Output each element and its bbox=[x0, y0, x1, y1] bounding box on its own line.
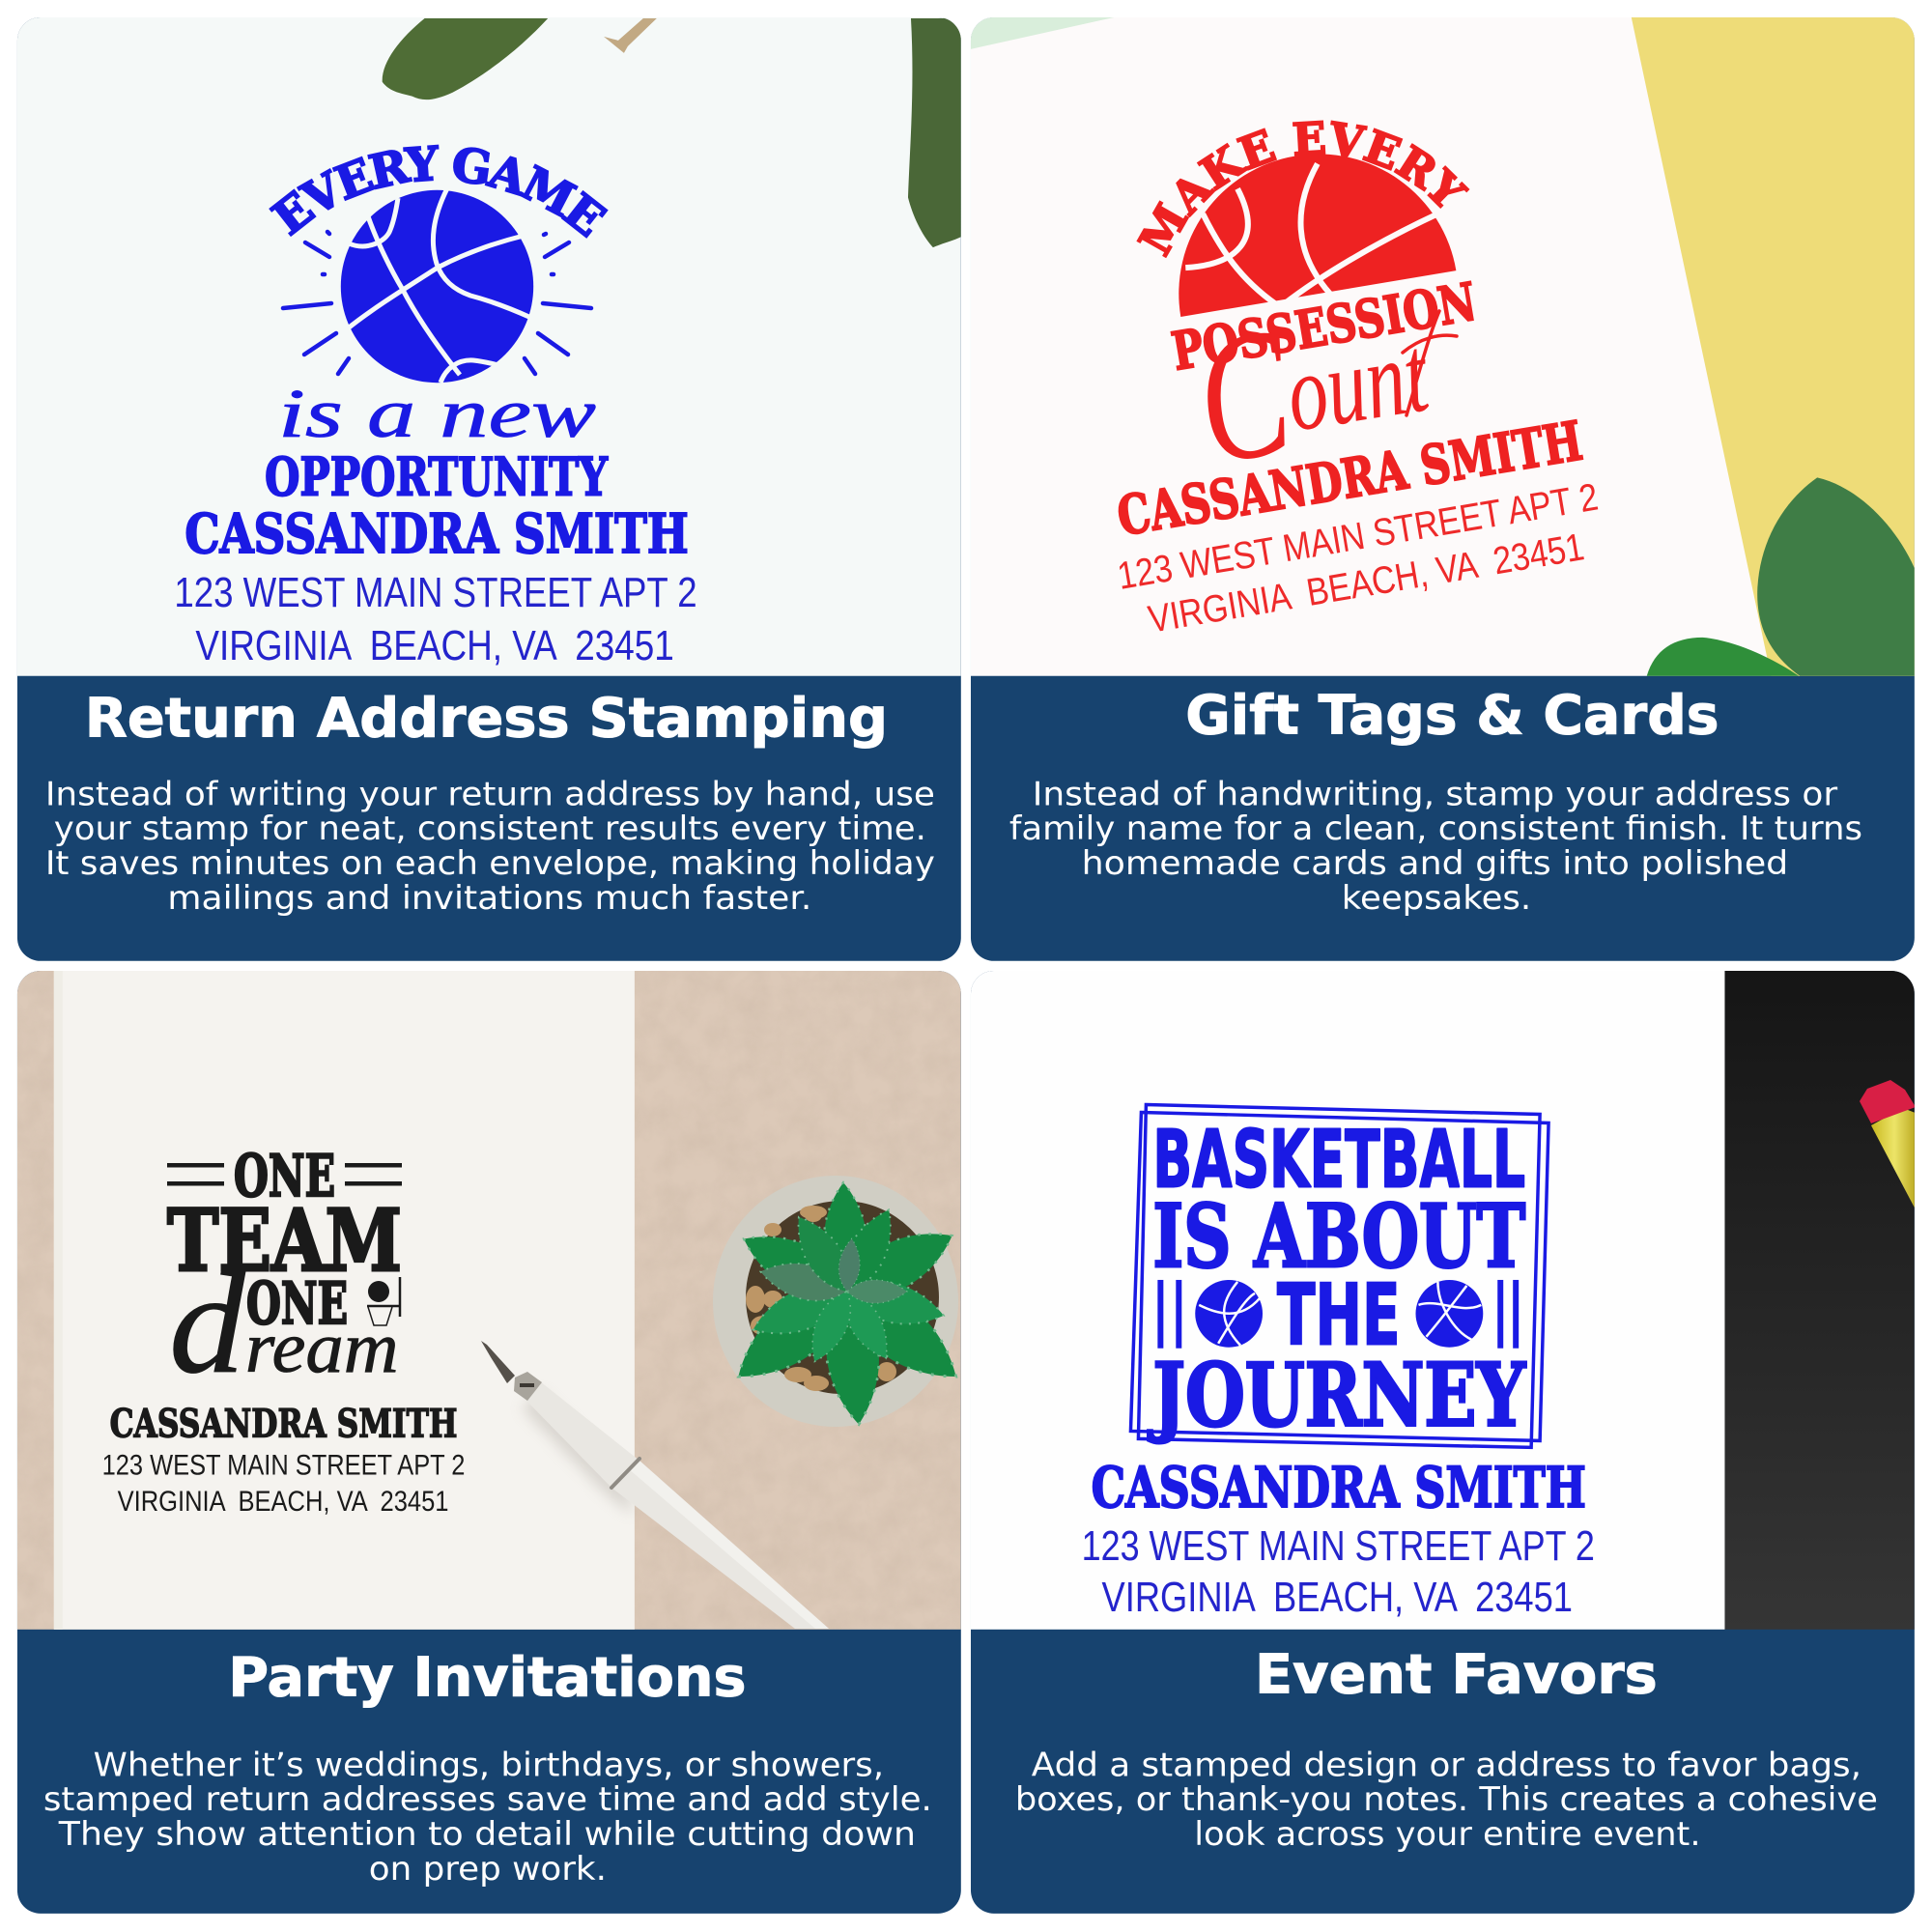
twig bbox=[604, 18, 657, 53]
body text bbox=[43, 1746, 932, 1888]
body text: homemade cards and gifts into polished bbox=[1082, 844, 1788, 882]
arched headline: MAKE EVERY bbox=[1136, 120, 1470, 259]
body text bbox=[1009, 775, 1862, 917]
yellow background bbox=[1632, 17, 1915, 676]
address line 1: 123 WEST MAIN STREET APT 2 bbox=[1082, 1522, 1595, 1570]
body text: It saves minutes on each envelope, making holiday bbox=[45, 844, 935, 882]
heading: Return Address Stamping bbox=[85, 688, 888, 751]
stamp: blue journey design bbox=[1082, 1105, 1595, 1621]
leaf: top right bbox=[908, 18, 961, 247]
slab line: IS ABOUT bbox=[1152, 1186, 1525, 1288]
address line 1: 123 WEST MAIN STREET APT 2 bbox=[174, 569, 697, 616]
body text bbox=[1015, 1746, 1878, 1853]
name: CASSANDRA SMITH bbox=[1113, 410, 1587, 549]
hoop icon bbox=[367, 1277, 400, 1325]
body text: Instead of handwriting, stamp your address or bbox=[1033, 775, 1837, 812]
panel: gift tags and cards bbox=[970, 17, 1915, 961]
stamp: black team design bbox=[166, 1151, 402, 1374]
slab word: THE bbox=[1277, 1266, 1401, 1365]
photo: black stamp on notebook with pen and plant bbox=[17, 971, 973, 1630]
dark surface bbox=[1724, 971, 1915, 1630]
name: CASSANDRA SMITH bbox=[185, 503, 689, 566]
body text: stamped return addresses save time and add style. bbox=[43, 1780, 932, 1818]
pencil bbox=[1860, 1080, 1918, 1213]
leaf: small bbox=[1647, 638, 1799, 676]
address line 2: VIRGINIA BEACH, VA 23451 bbox=[118, 1486, 449, 1518]
address line 2: VIRGINIA BEACH, VA 23451 bbox=[195, 622, 674, 669]
panel: return address stamping bbox=[17, 17, 961, 961]
slab line: JOURNEY bbox=[1148, 1345, 1526, 1446]
address line 1: 123 WEST MAIN STREET APT 2 bbox=[102, 1449, 465, 1481]
body text: mailings and invitations much faster. bbox=[167, 879, 811, 917]
script word: ount bbox=[1278, 313, 1437, 455]
arched headline: EVERY GAME bbox=[269, 145, 609, 239]
rounded line: BASKETBALL bbox=[1152, 1114, 1525, 1206]
slab line one two: ONE bbox=[246, 1270, 348, 1338]
stamp: blue basketball design bbox=[269, 145, 609, 438]
script word: C bbox=[1183, 288, 1304, 503]
panel: event favors bbox=[971, 971, 1918, 1914]
balls and bars row bbox=[1157, 1280, 1519, 1349]
plant pot bbox=[713, 1176, 973, 1427]
notebook bbox=[54, 971, 635, 1630]
pebbles bbox=[746, 1206, 896, 1391]
leaf: large bbox=[1757, 477, 1915, 676]
body text: family name for a clean, consistent finish. It turns bbox=[1009, 810, 1862, 847]
panel: party invitations bbox=[17, 971, 973, 1914]
slab line team: TEAM bbox=[167, 1190, 402, 1291]
body text: look across your entire event. bbox=[1194, 1815, 1701, 1853]
body text: keepsakes. bbox=[1342, 879, 1531, 917]
name: CASSANDRA SMITH bbox=[110, 1402, 457, 1446]
script word: dream bbox=[169, 1243, 399, 1404]
name: CASSANDRA SMITH bbox=[1092, 1455, 1586, 1520]
pale green corner bbox=[971, 17, 1115, 49]
slab line: POSSESSION bbox=[1167, 270, 1481, 383]
slab line: OPPORTUNITY bbox=[265, 445, 608, 507]
photo: blue framed stamp on white with dark surface bbox=[971, 971, 1918, 1630]
pen bbox=[481, 1341, 829, 1629]
body text: Instead of writing your return address by hand, use bbox=[45, 775, 935, 812]
photo: blue basketball stamp on white with leaves bbox=[17, 17, 961, 676]
body text: on prep work. bbox=[369, 1850, 607, 1888]
leaf: top centre bbox=[383, 18, 548, 99]
basketball icon bbox=[283, 188, 591, 383]
photo: red basketball stamp on card with yellow background bbox=[971, 17, 1915, 676]
body text: Whether it’s weddings, birthdays, or showers, bbox=[94, 1746, 884, 1783]
frames bbox=[1130, 1105, 1548, 1447]
heading: Gift Tags & Cards bbox=[1185, 685, 1719, 748]
body text: Add a stamped design or address to favor bags, bbox=[1032, 1746, 1861, 1783]
address line 2: VIRGINIA BEACH, VA 23451 bbox=[1102, 1574, 1573, 1621]
body text: your stamp for neat, consistent results every time. bbox=[54, 810, 926, 847]
body text: They show attention to detail while cutting down bbox=[58, 1815, 916, 1853]
t swash bbox=[1403, 311, 1457, 415]
heading: Event Favors bbox=[1255, 1644, 1658, 1707]
script line: is a new bbox=[278, 375, 596, 452]
slab line one: ONE bbox=[234, 1143, 335, 1210]
address line 1: 123 WEST MAIN STREET APT 2 bbox=[1115, 475, 1601, 598]
half basketball bbox=[1179, 154, 1456, 317]
heading: Party Invitations bbox=[228, 1647, 747, 1710]
stamp: red basketball design bbox=[1119, 120, 1598, 632]
side bars bbox=[167, 1163, 402, 1185]
succulent leaves bbox=[736, 1180, 958, 1427]
address line 2: VIRGINIA BEACH, VA 23451 bbox=[1146, 526, 1587, 641]
body text: boxes, or thank-you notes. This creates a cohesive bbox=[1015, 1780, 1878, 1818]
slab line and script word bbox=[1171, 280, 1474, 459]
body text bbox=[45, 775, 935, 917]
